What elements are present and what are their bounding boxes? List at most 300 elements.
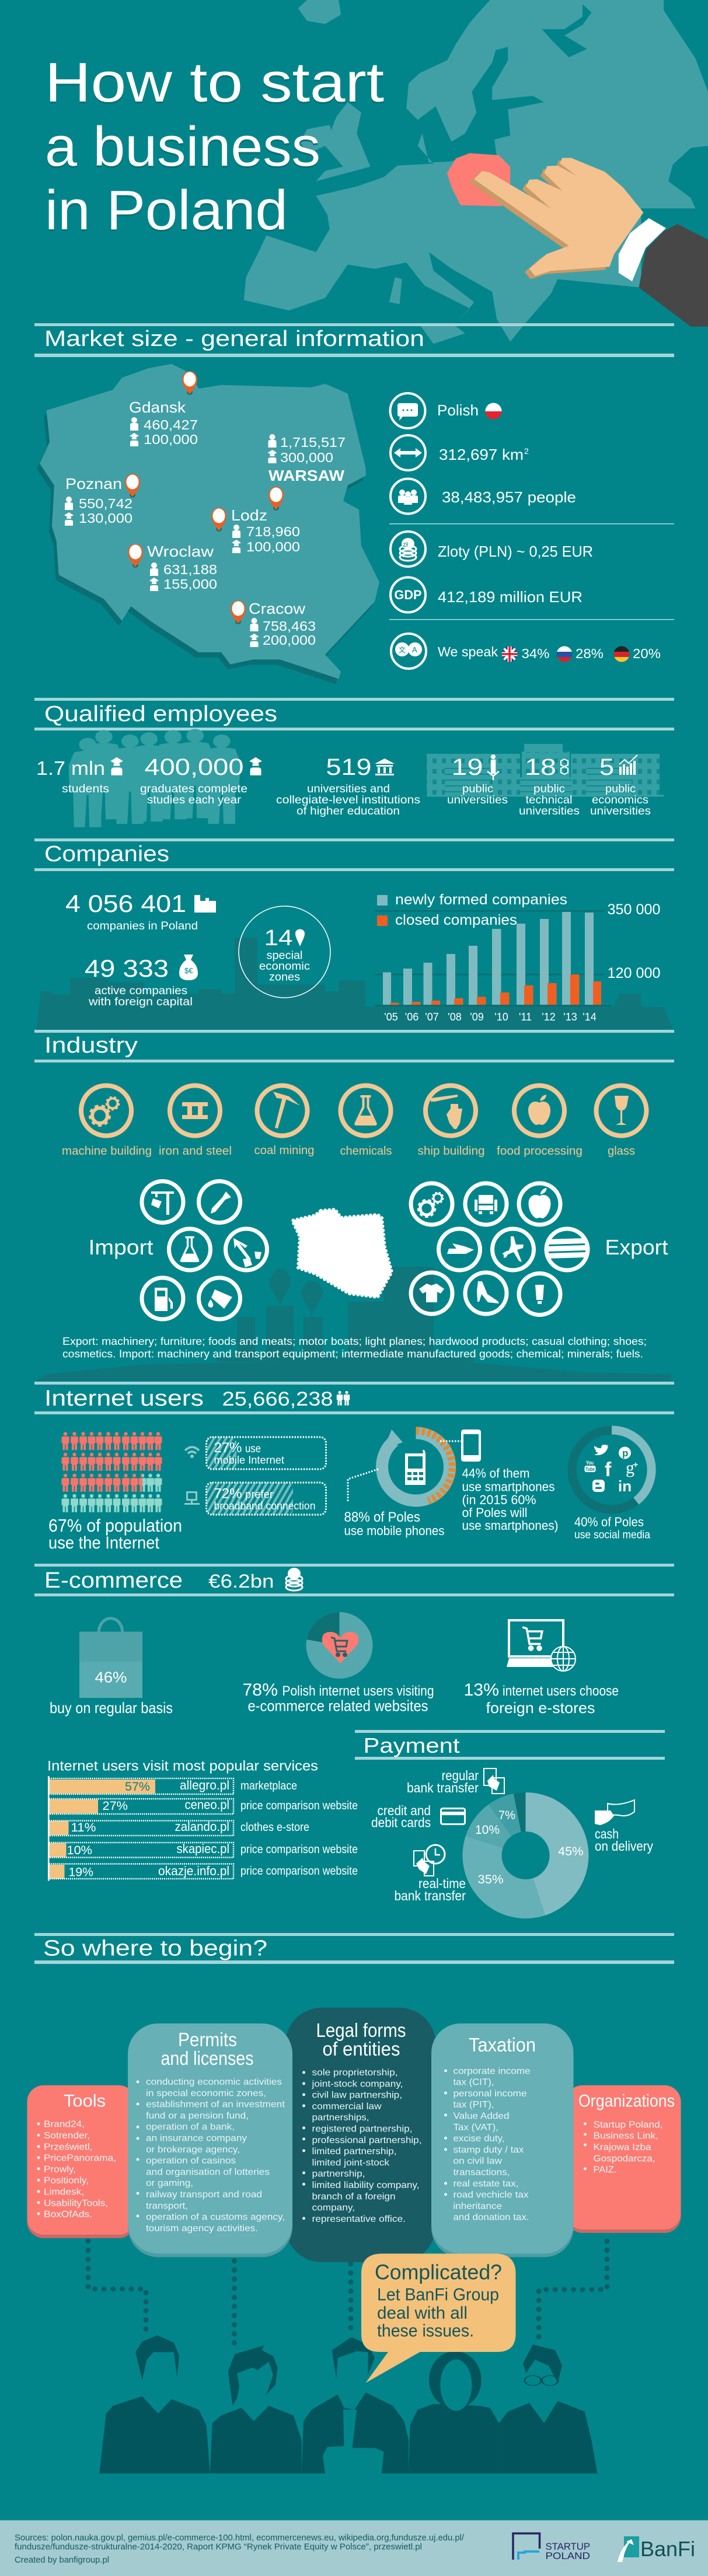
year labels: '05 [384, 1011, 398, 1023]
label: credit and debit cards: debit cards [371, 1815, 431, 1830]
smartphone use: (in 2015 60% [462, 1493, 536, 1507]
legal forms list [302, 2068, 421, 2224]
donut chart: payment methods: 35% [477, 1873, 503, 1886]
person 2 [210, 2346, 302, 2473]
bar chart: newly formed vs closed companies [375, 892, 661, 1023]
city: Gdansk [129, 371, 198, 447]
shirt cuff [619, 218, 666, 281]
donut: mobile phone use: use mobile phones [344, 1523, 445, 1538]
row: ceneo.pl: 27% [103, 1799, 128, 1813]
row: okazje.info.pl: price comparison website [240, 1865, 358, 1878]
industry labels: chemicals [340, 1145, 392, 1158]
permits list: railway transport and road [146, 2190, 262, 2200]
stat: graduates: graduates complete [140, 783, 247, 795]
tools list: Limdesk, [44, 2187, 84, 2197]
row: zalando.pl: clothes e-store [240, 1821, 309, 1834]
taxation list: excise duty, [453, 2134, 504, 2144]
hand pointing at Poland [447, 153, 708, 327]
smartphone use: of Poles will [462, 1505, 528, 1520]
people row 4 [62, 1494, 162, 1512]
section: payment [355, 1733, 665, 1918]
fact: GDP [390, 578, 583, 613]
icon: twitter [594, 1445, 608, 1455]
fact: languages spoken [391, 634, 661, 669]
city: Warsaw: WARSAW [268, 467, 344, 484]
row: skapiec.pl: skapiec.pl [176, 1841, 229, 1856]
permits list: operation of a bank, [146, 2122, 235, 2132]
pie: visiting e-commerce websites: 78% [243, 1680, 278, 1700]
permits list: establishment of an investment [146, 2100, 285, 2110]
donut: social media use: 40% of Poles [574, 1515, 644, 1529]
taxation list: on civil law [453, 2156, 502, 2166]
smartphone use: 44% of them [462, 1466, 530, 1481]
legend [377, 892, 567, 928]
stat: public technical universities [519, 754, 580, 817]
sources [15, 2533, 465, 2565]
logo: Startup Poland: POLAND [545, 2550, 590, 2561]
heading: market size: Market size - general information [44, 327, 424, 351]
year labels [384, 1011, 597, 1023]
callout: special economic zones: special [266, 950, 302, 962]
stat: companies in Poland: companies in Poland [87, 920, 198, 932]
box: broadband connection [184, 1483, 326, 1515]
fact: languages spoken: 20% [633, 646, 661, 661]
heading: e-commerce: €6.2bn [208, 1571, 274, 1592]
legal forms list: sole proprietorship, [312, 2068, 398, 2078]
row: skapiec.pl: 10% [67, 1844, 92, 1857]
stat: public universities: 19 [452, 754, 483, 780]
university buildings silhouette [427, 744, 664, 797]
stat: companies in Poland [65, 890, 216, 932]
donut chart: payment methods: 45% [558, 1845, 584, 1858]
callout: special economic zones: economic [259, 960, 310, 973]
legal forms list: company, [312, 2203, 355, 2213]
speech bubble: complicated: these issues. [377, 2321, 474, 2341]
stat: companies with foreign capital [85, 955, 198, 1008]
tools list: Prowly, [44, 2165, 76, 2175]
taxation list: real estate tax, [453, 2179, 518, 2189]
industry labels: food processing [497, 1145, 583, 1158]
organizations list: Startup Poland, [593, 2120, 663, 2130]
city skyline silhouette [36, 938, 673, 1029]
tools list: PricePanorama, [44, 2154, 116, 2163]
pie: visiting e-commerce websites: Polish internet users visiting [282, 1683, 434, 1699]
footer [0, 2521, 708, 2576]
closed company bars [390, 974, 601, 1005]
label: cash on delivery: cash [595, 1826, 619, 1841]
bar chart: most popular services: Internet users visit most popular services [47, 1759, 318, 1774]
stat: companies with foreign capital: 49 333 [85, 955, 169, 982]
stat: companies with foreign capital: with foreign capital [88, 996, 193, 1008]
smartphone use [440, 1429, 558, 1533]
city: Lodz: Lodz [231, 506, 267, 524]
sources: Created by banfigroup.pl [15, 2555, 109, 2565]
section: companies [34, 842, 674, 1029]
permits list: or brokerage agency, [146, 2145, 240, 2155]
year labels: '06 [405, 1011, 418, 1023]
legal forms list: limited joint-stock [312, 2158, 390, 2168]
callout: special economic zones [239, 906, 330, 998]
organizations list: Business Link, [593, 2131, 658, 2141]
row: okazje.info.pl [49, 1864, 358, 1879]
icon: hardwood [549, 1231, 586, 1268]
stat: public economics universities: public [605, 783, 636, 795]
icon: minerals and pickaxe [225, 1229, 267, 1270]
city: Lodz: 100,000 [246, 539, 300, 554]
box: mobile internet: mobile Internet [214, 1454, 284, 1466]
icon: youtube: You [586, 1460, 594, 1466]
panel: taxation: Taxation [469, 2034, 536, 2056]
icon: linkedin: in [618, 1477, 632, 1495]
box: broadband connection: prefer [245, 1489, 274, 1501]
row: okazje.info.pl: okazje.info.pl [158, 1864, 229, 1878]
stat: public universities [447, 754, 508, 806]
section: market size [34, 327, 674, 684]
organizations list: Krajowa Izba [593, 2142, 651, 2152]
legal forms list: representative office. [312, 2214, 406, 2224]
axis labels: 350 000 [607, 901, 661, 918]
year labels: '10 [494, 1011, 508, 1023]
city: Warsaw: 1,715,517 [280, 435, 346, 450]
city: Warsaw: 300,000 [280, 450, 333, 465]
fact: GDP: 412,189 million EUR [438, 588, 583, 606]
stat: public technical universities: technical [525, 794, 572, 806]
team silhouettes [99, 2335, 597, 2473]
year labels: '07 [425, 1011, 439, 1023]
stat: students: students [62, 783, 109, 795]
panel: legal forms of entities [285, 2008, 435, 2262]
row: allegro.pl: allegro.pl [180, 1778, 229, 1792]
industry labels [62, 1144, 635, 1158]
stat: public universities: public [462, 783, 493, 795]
icon: motor boat [439, 1229, 480, 1270]
stat: public technical universities: 18 [525, 754, 556, 780]
label: regular bank transfer [407, 1768, 504, 1795]
icon: foods [519, 1183, 560, 1225]
legal forms list: registered partnership, [312, 2124, 412, 2134]
icon: machinery [411, 1183, 452, 1225]
people row 3 [62, 1474, 162, 1492]
icon: screw [198, 1181, 240, 1223]
speech bubble: complicated: deal with all [377, 2304, 468, 2323]
permits list: or gaming, [146, 2179, 193, 2189]
laptop: foreign e-stores: foreign e-stores [486, 1699, 595, 1717]
pie: visiting e-commerce websites [243, 1612, 434, 1714]
sources: fundusze/fundusze-strukturalne-2014-2020, Raport KPMG “Rynek Private Equity w Polsce”, przeswietl.pl [15, 2542, 422, 2552]
permits list: an insurance company [146, 2133, 247, 2144]
fact: language [390, 393, 503, 428]
donut: social media use: use social media [574, 1529, 650, 1542]
city: Poznan [64, 474, 140, 526]
text: export and import details: cosmetics. Import: machinery and transport equipment; intermediate manufactured goods; chemical; minerals; fuels. [62, 1348, 643, 1359]
donut: mobile phone use [344, 1429, 452, 1538]
factory silhouette [35, 1267, 671, 1381]
title [45, 51, 384, 242]
heading: qualified employees: Qualified employees [44, 702, 277, 726]
stat: public economics universities: universities [590, 805, 651, 817]
pictogram: 67 percent of population [48, 1432, 182, 1553]
heading: internet users: 25,666,238 [222, 1388, 333, 1410]
city: Wroclaw: 155,000 [163, 576, 217, 592]
icon: coal mining [257, 1085, 307, 1135]
icon: clothing [411, 1273, 452, 1314]
city: Gdansk: Gdansk [129, 399, 186, 416]
Poland highlighted in red [447, 153, 510, 207]
person 5 [499, 2344, 597, 2473]
stat: public universities: universities [447, 794, 508, 806]
hand [474, 158, 643, 276]
stat: buy on regular basis: 46% [95, 1669, 127, 1686]
taxation list: tax (PIT), [453, 2100, 494, 2110]
stat: public economics universities: economics [592, 794, 648, 806]
row: skapiec.pl: price comparison website [240, 1843, 358, 1856]
icon: machine building [81, 1085, 131, 1135]
legal forms list: joint-stock company, [311, 2079, 403, 2089]
legal forms list: limited partnership, [312, 2147, 397, 2156]
stat: public technical universities: public [533, 783, 565, 795]
taxation list [444, 2066, 531, 2222]
pictogram: 67 percent of population: use the Internet [48, 1533, 160, 1553]
icon: google plus: + [633, 1460, 638, 1469]
legal forms list: civil law partnership, [312, 2091, 402, 2100]
box: mobile internet: use [245, 1443, 261, 1455]
taxation list: stamp duty / tax [453, 2145, 524, 2155]
legal forms list: limited liability company, [312, 2180, 419, 2190]
logo: Startup Poland: STARTUP [545, 2541, 590, 2552]
laptop: foreign e-stores: 13% [463, 1680, 499, 1700]
stat: higher education institutions [276, 754, 420, 817]
logo: Startup Poland [513, 2533, 590, 2561]
crowd silhouette [69, 729, 240, 827]
stat: graduates: studies each year [147, 794, 242, 806]
label: real-time bank transfer: real-time [418, 1876, 466, 1891]
legend: newly formed companies [395, 892, 567, 908]
fact: GDP: GDP [395, 588, 421, 602]
text: export and import details [62, 1336, 647, 1359]
pictogram: 67 percent of population: 67% of population [48, 1515, 182, 1536]
background map of Europe [244, 0, 708, 344]
industry labels: iron and steel [159, 1145, 232, 1158]
stat: graduates: 400,000 [145, 754, 244, 780]
icon: glass [597, 1085, 647, 1135]
new company bars [383, 912, 594, 1005]
smartphone use: use smartphones [462, 1480, 554, 1494]
fact: languages spoken: 28% [576, 646, 604, 661]
stat: public economics universities: 5 [599, 754, 614, 780]
tools list: UsabilityTools, [44, 2198, 108, 2208]
donut: social media use [572, 1430, 651, 1542]
callout: special economic zones: zones [269, 971, 300, 984]
panel: permits and licenses: and licenses [161, 2047, 253, 2069]
taxation list: corporate income [453, 2066, 531, 2076]
icon: mobile phone [405, 1450, 426, 1485]
industry labels: ship building [418, 1145, 484, 1158]
section: industry [34, 1033, 674, 1381]
export icons [411, 1183, 588, 1315]
callout: special economic zones: 14 [264, 926, 293, 950]
fact: currency: zł [403, 540, 408, 548]
dotted connectors [88, 2241, 607, 2346]
stat: public technical universities: universities [519, 805, 580, 817]
taxation list: transactions, [453, 2168, 510, 2177]
text: export and import details: Export: machinery; furniture; foods and meats; motor boats; light planes; hardwood products; casual clothing; shoes; [62, 1336, 647, 1347]
industry labels: coal mining [254, 1144, 314, 1157]
import icons [142, 1181, 267, 1319]
donut chart: payment methods: 10% [475, 1823, 500, 1837]
permits list: transport, [146, 2201, 188, 2211]
box: mobile internet: 27% [214, 1440, 242, 1456]
row: allegro.pl [49, 1778, 297, 1794]
panel: organizations: Organizations [578, 2091, 675, 2111]
city: Wroclaw: 631,188 [163, 562, 217, 577]
speech bubble: complicated: Complicated? [375, 2260, 502, 2284]
stat: companies with foreign capital: active companies [95, 985, 187, 997]
stat: higher education institutions: of higher education [297, 805, 400, 817]
taxation list: inheritance [453, 2201, 502, 2211]
panel: tools: Tools [64, 2091, 106, 2111]
organizations list [584, 2120, 663, 2175]
tools list: Brand24, [44, 2119, 85, 2130]
heading: internet users: Internet users [44, 1386, 204, 1411]
icon: cosmetics [519, 1273, 560, 1315]
legal forms list: professional partnership, [312, 2135, 421, 2145]
hand shadow [470, 160, 639, 279]
icon: ship building [426, 1085, 476, 1135]
heading: internet users [44, 1386, 350, 1411]
row: ceneo.pl [49, 1797, 358, 1814]
fact: currency: Zloty (PLN) ~ 0,25 EUR [438, 543, 593, 560]
icon: pinterest: p [622, 1448, 628, 1459]
fact: population: 38,483,957 people [442, 488, 576, 506]
row: ceneo.pl: price comparison website [240, 1799, 358, 1812]
box: mobile internet [185, 1437, 326, 1469]
stat: students: 1.7 mln [36, 757, 105, 779]
glasses [525, 2375, 558, 2386]
heading: e-commerce: E-commerce [44, 1568, 183, 1593]
tools list: Prześwietl, [44, 2142, 92, 2152]
industry icons row [62, 1085, 647, 1158]
person 1 [99, 2335, 210, 2473]
pie: visiting e-commerce websites: e-commerce related websites [247, 1697, 428, 1714]
panel: organizations [566, 2085, 681, 2233]
donut chart: payment methods [463, 1792, 588, 1918]
stat: higher education institutions: universities and [307, 783, 390, 795]
row: zalando.pl [49, 1819, 309, 1836]
icon: shoes [465, 1273, 507, 1314]
panel: tools [27, 2085, 135, 2238]
permits list: operation of a customs agency, [146, 2213, 285, 2222]
row: zalando.pl: zalando.pl [175, 1819, 229, 1834]
organizations list: PAIZ. [593, 2165, 616, 2175]
permits list: conducting economic activities [146, 2077, 282, 2087]
donut chart: payment methods: 7% [498, 1809, 515, 1822]
stat: public economics universities [590, 754, 651, 817]
city: Wroclaw: Wroclaw [147, 543, 214, 560]
city: Cracow [231, 600, 316, 648]
taxation list: personal income [453, 2089, 527, 2099]
panel: legal forms of entities: Legal forms [316, 2019, 406, 2041]
label: real-time bank transfer [395, 1845, 466, 1903]
city: Cracow: Cracow [249, 600, 305, 617]
icon: blogger [592, 1480, 605, 1492]
stat: graduates [140, 754, 262, 806]
heading: so where to begin: So where to begin? [43, 1936, 267, 1960]
title: a business [45, 116, 320, 178]
icon: oil canister [198, 1278, 240, 1319]
section: qualified employees [34, 702, 674, 827]
panel: legal forms of entities: of entities [322, 2038, 400, 2060]
fact: languages spoken: We speak [438, 644, 498, 659]
fact: population [390, 478, 576, 513]
stat: buy on regular basis [50, 1619, 173, 1717]
icon: facebook: f [605, 1459, 612, 1481]
city: Poznan: Poznan [65, 475, 122, 492]
donut: mobile phone use: 88% of Poles [344, 1509, 420, 1525]
year labels: '14 [583, 1011, 597, 1023]
map shadow [37, 369, 376, 684]
box: broadband connection: broadband connection [214, 1500, 315, 1512]
legal forms list: partnerships, [312, 2113, 369, 2123]
icon: fuel pump [142, 1278, 183, 1319]
white dotted map of Poland [292, 1210, 392, 1297]
people row 2 [62, 1453, 162, 1471]
box: broadband connection: 72% [214, 1486, 242, 1502]
heading: industry: Industry [44, 1033, 138, 1058]
icon: iron and steel [170, 1085, 220, 1135]
icon: smartphone [461, 1429, 481, 1462]
city: Poznan: 130,000 [79, 511, 132, 526]
label: regular bank transfer: bank transfer [407, 1780, 479, 1795]
icon: flask [169, 1229, 210, 1270]
jacket sleeve [639, 224, 708, 327]
label: export: Export [605, 1235, 668, 1259]
industry labels: machine building [62, 1145, 152, 1158]
fact: language: Polish [437, 401, 479, 419]
title: How to start [45, 51, 384, 114]
city: Gdansk: 460,427 [144, 417, 198, 432]
label: regular bank transfer: regular [441, 1768, 479, 1783]
logo: BanFi: BanFi [640, 2537, 695, 2561]
icon: youtube: Tube [585, 1466, 595, 1472]
map of Poland [40, 364, 379, 679]
permits list: fund or a pension fund, [146, 2111, 249, 2121]
legal forms list: partnership, [312, 2169, 365, 2179]
stat: students [36, 757, 123, 795]
stat: higher education institutions: 519 [326, 754, 371, 780]
stat: buy on regular basis: buy on regular basis [50, 1699, 173, 1717]
city: Cracow: 200,000 [263, 632, 316, 648]
legal forms list: branch of a foreign [312, 2191, 396, 2201]
year labels: '11 [519, 1011, 532, 1023]
label: real-time bank transfer: bank transfer [395, 1888, 466, 1903]
city: Gdansk: 100,000 [144, 432, 198, 447]
city: Lodz: 718,960 [246, 524, 300, 539]
fact: currency [390, 532, 593, 567]
icon: light plane [493, 1229, 533, 1270]
row: allegro.pl: 57% [125, 1780, 150, 1794]
permits list [137, 2077, 285, 2234]
axis labels: 120 000 [607, 965, 661, 981]
stat: companies in Poland: 4 056 401 [65, 890, 186, 917]
city: Lodz [211, 506, 300, 554]
title: in Poland [45, 179, 288, 242]
section: e-commerce [34, 1568, 674, 1717]
tools list: Positionly, [44, 2176, 89, 2186]
icon: google plus: g [626, 1458, 634, 1477]
taxation list: Tax (VAT), [453, 2123, 498, 2133]
taxation list: tax (CIT), [453, 2078, 494, 2088]
city: Warsaw [267, 434, 346, 511]
